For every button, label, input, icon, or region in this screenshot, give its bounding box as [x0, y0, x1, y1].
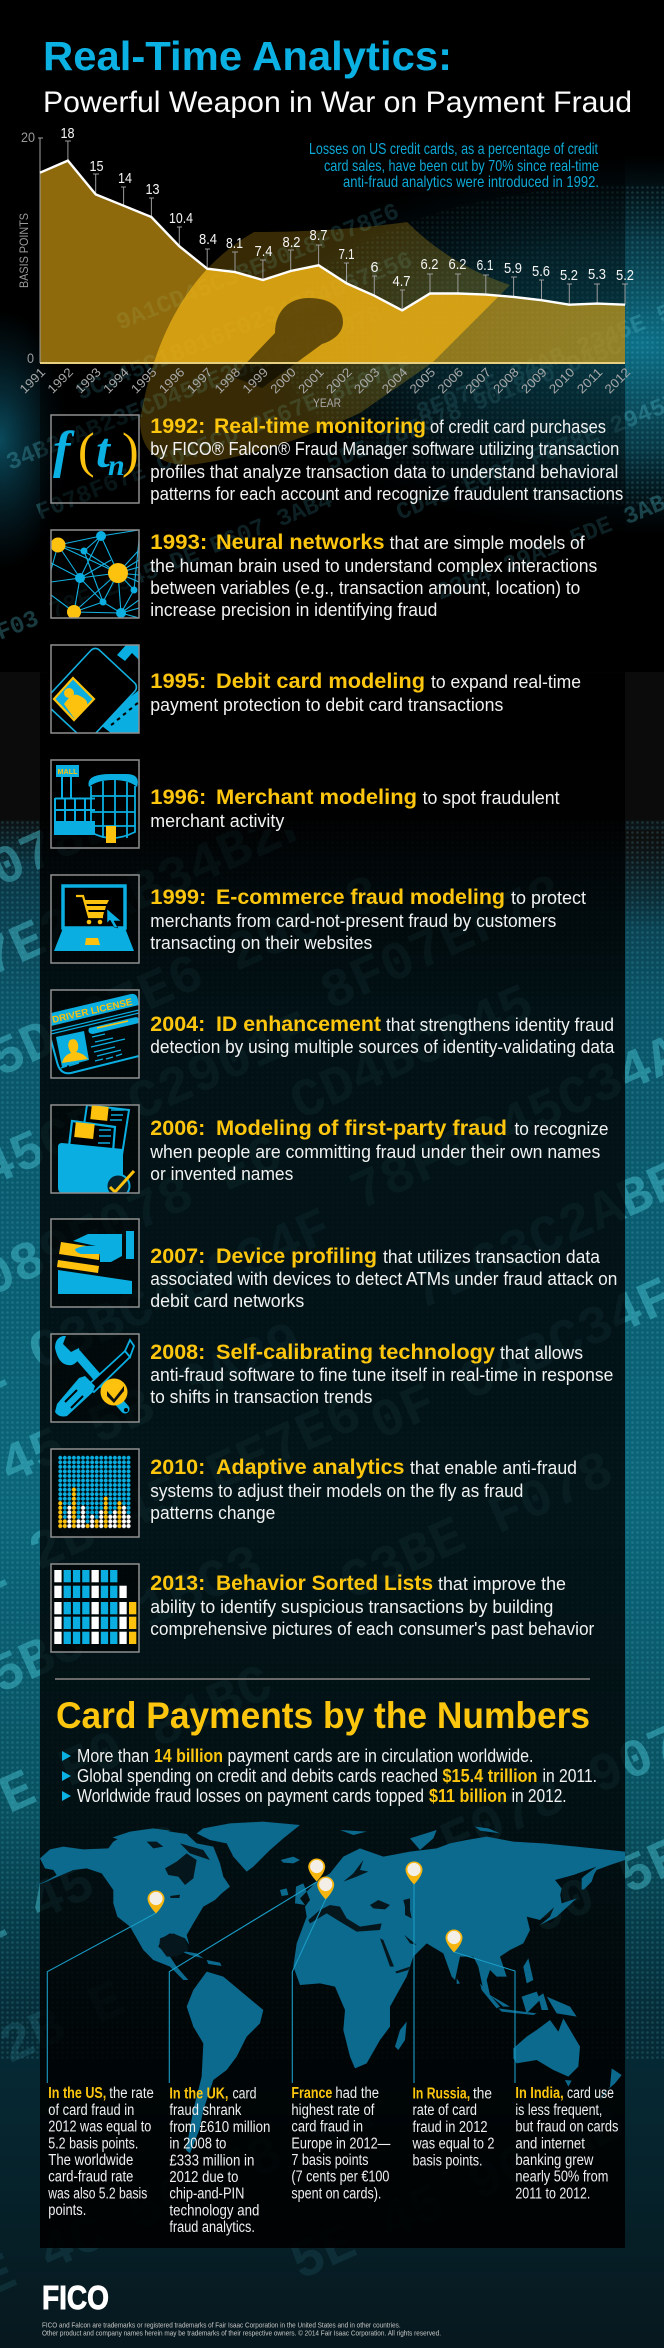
- background: 34B23AB23ECD45DE29A1FE78F078: [3, 301, 387, 477]
- footer legal text: Other product and company names herein may be trademarks of their respective owners. © 2014 Fair Isaac Corporation. All rights reserved.: [42, 2328, 441, 2338]
- text: real-time monitoring: Real-time monitoring: [214, 414, 426, 438]
- text: behavior sorted lists: ability to identify suspicious transactions by building: [150, 1597, 553, 1617]
- bullet statistics: [62, 1746, 597, 1806]
- footer legal text: [42, 2320, 441, 2338]
- background: 5E 45 90 AB: [282, 2095, 633, 2296]
- background: 5DE 78F078 9018F0 D45C: [323, 334, 627, 477]
- bullet statistics: 14 billion: [154, 1746, 223, 1766]
- bullet statistics: $11 billion: [429, 1786, 507, 1806]
- year axis labels: 1997: [184, 365, 215, 396]
- country column: US: [48, 2085, 154, 2219]
- y axis labels: 20: [21, 129, 35, 145]
- text: ID enhancement: 2004:: [150, 1012, 205, 1036]
- text: device profiling: Device profiling: [216, 1244, 377, 1268]
- data labels: 8.7: [310, 227, 328, 244]
- data labels: 8.1: [226, 235, 243, 252]
- text: self-calibrating technology: 2008:: [150, 1340, 205, 1364]
- icon: f(tn) formula: [51, 415, 139, 503]
- text: merchant modeling: [150, 785, 560, 831]
- text: modeling of first-party fraud: 2006:: [150, 1116, 205, 1140]
- text: neural networks: 1993:: [150, 530, 207, 554]
- footer legal text: FICO and Falcon are trademarks or registered trademarks of Fair Isaac Corporation in the United States and in other countries.: [42, 2320, 401, 2330]
- text: e-commerce fraud modeling: to protect: [511, 888, 586, 908]
- text: e-commerce fraud modeling: transacting on their websites: [150, 933, 372, 953]
- text: adaptive analytics: 2010:: [150, 1455, 205, 1479]
- country column: France: spent on cards).: [291, 2185, 381, 2202]
- text: self-calibrating technology: Self-calibrating technology: [216, 1340, 495, 1364]
- country column: US: card-fraud rate: [48, 2169, 133, 2186]
- icon: neural network: [50, 530, 139, 619]
- icon: f(tn) formula: n: [108, 449, 125, 482]
- text: real-time monitoring: 1992:: [150, 414, 205, 438]
- year axis labels: [17, 365, 633, 410]
- data labels: 5.3: [588, 266, 606, 283]
- year axis labels: 2008: [491, 365, 522, 396]
- country column: India: is less frequent,: [515, 2102, 602, 2119]
- text: real-time monitoring: of credit card purchases: [430, 417, 606, 437]
- text: device profiling: debit card networks: [150, 1291, 304, 1311]
- country column: India: banking grew: [515, 2152, 594, 2169]
- bullet statistics: $15.4 trillion: [442, 1766, 538, 1786]
- text: modeling of first-party fraud: [149, 1116, 608, 1184]
- eurasia, africa and oceania: [280, 1827, 625, 2100]
- data labels: 7.4: [254, 243, 272, 260]
- country column: UK: from £610 million: [169, 2119, 270, 2136]
- text: behavior sorted lists: [150, 1571, 594, 1639]
- data labels: 4.7: [392, 273, 410, 290]
- icon: driver license: [51, 990, 140, 1078]
- country column: Russia: basis points.: [412, 2152, 482, 2169]
- title: [43, 33, 632, 119]
- text: behavior sorted lists: Behavior Sorted Lists: [216, 1571, 433, 1595]
- text: neural networks: [150, 530, 597, 620]
- world map: [32, 1822, 625, 2153]
- country column: France: highest rate of: [291, 2102, 375, 2119]
- year axis labels: 1998: [212, 365, 243, 396]
- bullet statistics: Worldwide fraud losses on payment cards topped: [77, 1786, 424, 1806]
- text: adaptive analytics: systems to adjust their models on the fly as fraud: [150, 1481, 523, 1501]
- y axis labels: [17, 129, 35, 366]
- text: neural networks: that are simple models of: [390, 533, 586, 553]
- text: debit card modeling: [150, 669, 581, 715]
- y axis labels: BASIS POINTS: [17, 213, 31, 288]
- text: modeling of first-party fraud: or invented names: [150, 1164, 293, 1184]
- bullet statistics: Global spending on credit and debits cards reached: [77, 1766, 438, 1786]
- country column: India: but fraud on cards: [515, 2119, 619, 2136]
- data labels: [60, 125, 634, 290]
- country column: UK: £333 million in: [169, 2152, 254, 2169]
- country column: France: 7 basis points: [291, 2152, 369, 2169]
- text: ID enhancement: [150, 1012, 615, 1057]
- country column: France: card fraud in: [291, 2119, 363, 2136]
- text: neural networks: the human brain used to understand complex interactions: [150, 556, 597, 576]
- country column: US: 5.2 basis points.: [48, 2135, 138, 2152]
- icon: shopping mall: MALL: [58, 769, 78, 776]
- data labels: 5.2: [616, 267, 634, 284]
- icon: f(tn) formula: ): [122, 422, 139, 478]
- text: debit card modeling: to expand real-time: [431, 672, 581, 692]
- text: modeling of first-party fraud: Modeling of first-party fraud: [216, 1116, 507, 1140]
- country column: UK: technology and: [169, 2202, 259, 2219]
- text: device profiling: 2007:: [150, 1244, 205, 1268]
- chart callout: card sales, have been cut by 70% since real-time: [324, 158, 599, 175]
- data labels: 13: [146, 181, 160, 198]
- shield with keyhole: [140, 222, 510, 465]
- chart callout: [309, 141, 599, 191]
- data labels: 18: [60, 125, 74, 142]
- bullet statistics: payment cards are in circulation worldwide.: [228, 1746, 534, 1766]
- country column: UK: 2012 due to: [169, 2169, 238, 2186]
- country column: Russia: the: [473, 2086, 492, 2102]
- country column: India: nearly 50% from: [515, 2169, 608, 2186]
- text: merchant modeling: merchant activity: [150, 811, 284, 831]
- year axis labels: 2002: [324, 365, 355, 396]
- chart area fill: [40, 161, 625, 363]
- country column: India: card use: [567, 2085, 614, 2102]
- value ticks: [65, 141, 628, 310]
- year axis labels: 2012: [602, 365, 633, 396]
- data labels: 8.2: [282, 234, 300, 251]
- timeline item: 1999: [51, 875, 586, 963]
- country column: US: The worldwide: [48, 2152, 133, 2169]
- year axis labels: 1995: [128, 365, 160, 396]
- text: ID enhancement: ID enhancement: [216, 1012, 381, 1036]
- icon: hand and card reader: [51, 1219, 139, 1307]
- americas: [32, 1822, 300, 2153]
- background: 8F07EF78: [312, 864, 574, 1026]
- bullet statistics: in 2011.: [542, 1766, 597, 1786]
- country column: US: 2012 was equal to: [48, 2119, 151, 2136]
- data labels: 15: [90, 158, 104, 175]
- text: adaptive analytics: that enable anti-fraud: [410, 1458, 577, 1478]
- FICO logo: FICO: [42, 2279, 109, 2316]
- icon: wrench and screwdriver: [51, 1334, 139, 1422]
- text: behavior sorted lists: that improve the: [438, 1574, 566, 1594]
- icon: dot matrix chart: [51, 1449, 139, 1537]
- country column: France: had the: [335, 2085, 379, 2102]
- text: e-commerce fraud modeling: 1999:: [150, 885, 206, 909]
- text: debit card modeling: payment protection to debit card transactions: [150, 695, 503, 715]
- icon: driver license: DRIVER LICENSE: [51, 997, 134, 1026]
- year axis labels: 2009: [519, 365, 550, 396]
- data line: [40, 161, 625, 310]
- data labels: 5.2: [560, 267, 578, 284]
- country column: India: [515, 2085, 619, 2202]
- data labels: 7.1: [338, 246, 354, 263]
- icon: f(tn) formula: t: [96, 422, 112, 478]
- text: self-calibrating technology: to shifts in transaction trends: [150, 1387, 372, 1407]
- data labels: 6: [370, 259, 378, 276]
- year axis labels: 1996: [156, 365, 187, 396]
- year axis labels: 2000: [268, 365, 299, 396]
- year axis labels: YEAR: [313, 396, 341, 410]
- text: adaptive analytics: Adaptive analytics: [216, 1455, 405, 1479]
- year axis labels: 1994: [101, 365, 132, 396]
- text: ID enhancement: detection by using multiple sources of identity-validating data: [150, 1037, 615, 1057]
- pin: US: [148, 1890, 164, 1914]
- year axis labels: 2010: [546, 365, 577, 396]
- data labels: 6.1: [476, 257, 494, 274]
- y axis labels: 0: [27, 350, 34, 366]
- timeline item: 2006: [51, 1105, 608, 1198]
- data labels: 10.4: [169, 210, 193, 227]
- country column: Russia: [412, 2086, 494, 2169]
- country column: UK: in 2008 to: [169, 2136, 226, 2153]
- pin: France: [317, 1876, 334, 1900]
- text: merchant modeling: 1996:: [150, 785, 206, 809]
- line chart: basis points by year: [20, 128, 634, 407]
- country column: UK: [169, 2086, 270, 2236]
- year axis labels: 2005: [407, 365, 438, 396]
- pin: UK: [308, 1858, 325, 1882]
- icon: sorted lists: [51, 1564, 139, 1652]
- icon: shopping mall: [51, 760, 139, 848]
- text: merchant modeling: Merchant modeling: [216, 785, 417, 809]
- text: e-commerce fraud modeling: [150, 885, 586, 953]
- year axis labels: 1993: [73, 365, 104, 396]
- text: merchant modeling: to spot fraudulent: [423, 788, 560, 808]
- timeline item: 1996: [51, 760, 560, 848]
- text: neural networks: increase precision in identifying fraud: [150, 600, 437, 620]
- icon: laptop with cart: [51, 875, 139, 963]
- year axis labels: 1991: [17, 365, 48, 396]
- background: 5C345C18016F0234B24B67E56: [73, 248, 417, 407]
- shield inside chart: [154, 266, 498, 362]
- year axis labels: 2001: [296, 365, 327, 396]
- country column: Russia: was equal to 2: [412, 2136, 494, 2153]
- icon: f(tn) formula: (: [78, 422, 95, 478]
- text: e-commerce fraud modeling: E-commerce fraud modeling: [216, 885, 505, 909]
- country column: US: of card fraud in: [48, 2102, 134, 2119]
- timeline item: 2004: [51, 990, 615, 1078]
- data labels: 6.2: [420, 256, 438, 273]
- background: F03 78F 2945 DE E607 3AB4: [0, 488, 337, 647]
- country column: US: In the US,: [48, 2085, 106, 2102]
- timeline item: 1995: [43, 645, 581, 743]
- text: behavior sorted lists: comprehensive pictures of each consumer's past behavior: [150, 1619, 594, 1639]
- text: modeling of first-party fraud: to recognize: [514, 1119, 608, 1139]
- data labels: 14: [118, 170, 132, 187]
- country column: France: (7 cents per €100: [291, 2169, 390, 2186]
- text: debit card modeling: Debit card modeling: [216, 669, 425, 693]
- pin: India: [446, 1930, 462, 1952]
- icon: folder of IDs: [51, 1105, 139, 1198]
- country column: France: France: [291, 2085, 333, 2102]
- text: real-time monitoring: patterns for each account and recognize fraudulent transactions: [150, 484, 623, 504]
- data labels: 5.9: [504, 260, 522, 277]
- timeline item: 2010: [51, 1449, 577, 1537]
- year axis labels: 2006: [435, 365, 466, 396]
- keyhole: [233, 298, 343, 388]
- year axis labels: 2007: [463, 365, 494, 396]
- text: ID enhancement: that strengthens identity fraud: [386, 1015, 614, 1035]
- country column: India: In India,: [515, 2085, 564, 2102]
- country column: UK: In the UK,: [169, 2086, 228, 2102]
- pin: Russia: [406, 1862, 422, 1884]
- timeline item: 2008: [51, 1334, 613, 1422]
- country column: UK: fraud shrank: [169, 2102, 242, 2119]
- country column: US: the rate: [109, 2085, 154, 2102]
- country column: France: Europe in 2012—: [291, 2135, 391, 2152]
- text: debit card modeling: 1995:: [150, 669, 206, 693]
- text: real-time monitoring: profiles that analyze transaction data to understand behavioral: [150, 462, 618, 482]
- text: self-calibrating technology: that allows: [500, 1343, 583, 1363]
- country column: US: was also 5.2 basis: [48, 2185, 147, 2202]
- text: adaptive analytics: patterns change: [150, 1503, 275, 1523]
- year axis labels: 2004: [379, 365, 410, 396]
- year axis labels: 2011: [574, 365, 605, 396]
- chart callout: anti-fraud analytics were introduced in 1992.: [343, 174, 599, 191]
- background: C3BE F078: [332, 1441, 623, 1616]
- country column: India: and internet: [515, 2135, 585, 2152]
- timeline item: 2013: [51, 1564, 594, 1652]
- background: CD4BCD45: [282, 974, 544, 1136]
- text: real-time monitoring: by FICO® Falcon® Fraud Manager software utilizing transaction: [150, 439, 619, 459]
- timeline item: 2007: [51, 1219, 617, 1311]
- data labels: 8.4: [199, 231, 217, 248]
- icon: f(tn) formula: f: [53, 422, 75, 479]
- country column: France: [291, 2085, 391, 2202]
- text: neural networks: between variables (e.g., transaction amount, location) to: [150, 578, 580, 598]
- text: neural networks: Neural networks: [216, 530, 385, 554]
- text: modeling of first-party fraud: when people are committing fraud under their own names: [149, 1142, 600, 1162]
- title: Powerful Weapon in War on Payment Fraud: [43, 86, 632, 119]
- bullet statistics: in 2012.: [512, 1786, 567, 1806]
- icon: debit card: [50, 644, 140, 734]
- data labels: 6.2: [448, 256, 466, 273]
- country column: UK: chip-and-PIN: [169, 2186, 244, 2203]
- background: 9A1CD45C3BE9018F078E6: [113, 199, 403, 337]
- text: device profiling: that utilizes transaction data: [383, 1247, 601, 1267]
- background: F078F67E CD45CD 2E67E 8F07EF: [33, 351, 417, 527]
- timeline item: 1993: [50, 530, 597, 620]
- text: real-time monitoring: [150, 414, 623, 504]
- year axis labels: 1999: [240, 365, 271, 396]
- text: adaptive analytics: [150, 1455, 577, 1523]
- country column: US: points.: [48, 2202, 86, 2219]
- connector lines: [47, 1882, 515, 2083]
- year axis labels: 1992: [45, 365, 76, 396]
- text: self-calibrating technology: anti-fraud software to fine tune itself in real-time in response: [150, 1365, 613, 1385]
- country column: Russia: fraud in 2012: [412, 2119, 488, 2136]
- text: device profiling: associated with devices to detect ATMs under fraud attack on: [150, 1269, 617, 1289]
- title: Real-Time Analytics:: [43, 33, 452, 79]
- bullet statistics: More than: [77, 1746, 149, 1766]
- country column: UK: fraud analytics.: [169, 2219, 255, 2236]
- text: device profiling: [150, 1244, 617, 1311]
- text: self-calibrating technology: [150, 1340, 613, 1407]
- country column: Russia: rate of card: [412, 2102, 477, 2119]
- year axis labels: 2003: [351, 365, 382, 396]
- country column: Russia: In Russia,: [412, 2086, 470, 2102]
- data labels: 5.6: [532, 263, 550, 280]
- axes: [39, 138, 41, 363]
- text: behavior sorted lists: 2013:: [150, 1571, 205, 1595]
- heading: card payments by the numbers: Card Payments by the Numbers: [56, 1695, 590, 1736]
- country column: UK: card: [232, 2086, 256, 2102]
- country column: India: 2011 to 2012.: [515, 2185, 590, 2202]
- timeline item: 1992: [51, 414, 623, 504]
- text: e-commerce fraud modeling: merchants from card-not-present fraud by customers: [150, 911, 556, 931]
